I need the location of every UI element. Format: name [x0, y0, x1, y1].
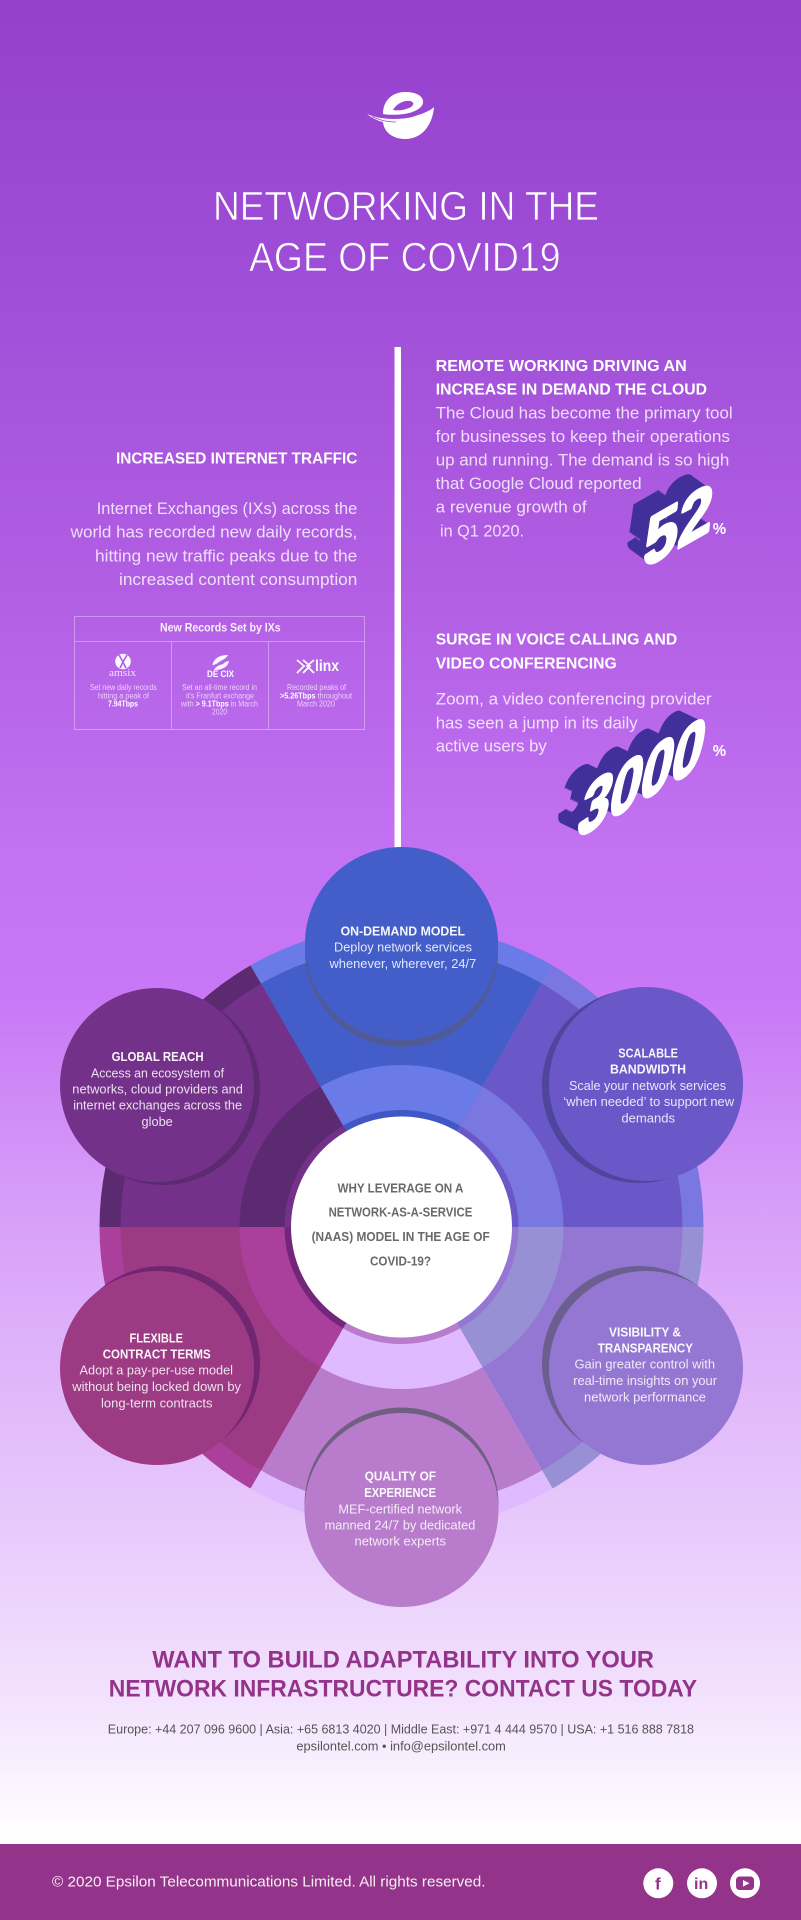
text block: zoom: [436, 690, 712, 756]
circle: flexible contract terms: long-term contracts: [101, 1395, 213, 1410]
circle: global reach: GLOBAL REACH: [112, 1049, 204, 1064]
center circle: why NaaS: [291, 1116, 512, 1338]
wheel sector: lower right: [457, 1227, 704, 1488]
text block: internet exchanges: increased content consumption: [119, 570, 357, 589]
wheel sector: bottom: [251, 1322, 552, 1513]
circle: on-demand model: ON-DEMAND MODEL: [341, 924, 465, 939]
heading: call to action: WANT TO BUILD ADAPTABILITY INTO YOUR: [152, 1646, 654, 1673]
circle: flexible contract terms: without being locked down by: [71, 1379, 241, 1394]
icon: de-cix: [212, 655, 229, 670]
table cell: amsix: 7.94Tbps: [108, 700, 138, 709]
title: NETWORKING IN THE: [213, 183, 599, 229]
text block: zoom: active users by: [436, 737, 547, 756]
table cell: amsix: amsix: [109, 667, 137, 679]
circle: visibility and transparency: network performance: [584, 1389, 706, 1404]
text block: cloud demand: The Cloud has become the primary tool: [436, 403, 733, 422]
circle: global reach: [60, 988, 260, 1185]
panel: voice and video: [436, 632, 726, 760]
percent sign: 3000: %: [713, 743, 726, 760]
circle: flexible contract terms: FLEXIBLE: [130, 1330, 183, 1345]
text block: cloud demand: [436, 403, 733, 540]
center circle: why NaaS: (NAAS) MODEL IN THE AGE OF: [312, 1229, 490, 1244]
table cell: de-cix: with > 9.1Tbps in March: [180, 700, 258, 709]
heading: increased internet traffic: INCREASED INTERNET TRAFFIC: [116, 450, 358, 467]
circle: global reach: networks, cloud providers and: [72, 1081, 243, 1096]
heading: call to action: NETWORK INFRASTRUCTURE? CONTACT US TODAY: [109, 1676, 697, 1703]
wheel sector: upper right: [456, 966, 704, 1227]
text block: zoom: Zoom, a video conferencing provider: [436, 690, 712, 709]
circle: global reach: globe: [142, 1114, 173, 1129]
circle: scalable bandwidth: SCALABLE: [618, 1045, 678, 1060]
heading: voice and video: [436, 632, 677, 672]
table cell: linx: March 2020: [297, 700, 335, 709]
circle: visibility and transparency: VISIBILITY &: [609, 1324, 681, 1339]
title: AGE OF COVID19: [249, 234, 560, 280]
table cell: de-cix: DE CIX: [207, 669, 235, 680]
heading: remote working: [436, 358, 707, 398]
circle: flexible contract terms: CONTRACT TERMS: [103, 1346, 211, 1361]
icon: linkedin: [687, 1868, 717, 1898]
wheel sector: lower left: [100, 1227, 346, 1488]
icon: linx: [297, 660, 314, 673]
stat: 3000 isometric number: 3000: [572, 698, 714, 857]
circle: scalable bandwidth: Scale your network services: [569, 1078, 726, 1093]
heading: remote working: INCREASE IN DEMAND THE CLOUD: [436, 381, 707, 398]
table cell: de-cix: [180, 655, 258, 717]
circle: global reach: Access an ecosystem of: [91, 1065, 224, 1080]
circle: quality of experience: manned 24/7 by dedicated: [325, 1518, 475, 1533]
text block: internet exchanges: hitting new traffic peaks due to the: [95, 546, 357, 565]
circle: visibility and transparency: [542, 1266, 743, 1465]
heading: voice and video: VIDEO CONFERENCING: [436, 655, 617, 672]
icon: facebook: [643, 1868, 673, 1898]
table cell: linx: [280, 658, 353, 709]
center circle: why NaaS: NETWORK-AS-A-SERVICE: [329, 1205, 473, 1220]
text block: cloud demand: for businesses to keep their operations: [436, 427, 730, 446]
table cell: linx: >5.26Tbps throughout: [280, 691, 353, 700]
icon: facebook: f: [655, 1874, 661, 1894]
circle: quality of experience: EXPERIENCE: [364, 1485, 436, 1500]
text block: contact details: Europe: +44 207 096 9600 | Asia: +65 6813 4020 | Middle East: +971 4 444 9570 | USA: +1 516 888 7818: [108, 1721, 694, 1736]
circle: on-demand model: whenever, wherever, 24/7: [329, 956, 476, 971]
circle: flexible contract terms: [60, 1266, 260, 1465]
text block: internet exchanges: Internet Exchanges (IXs) across the: [97, 499, 357, 518]
text block: zoom: has seen a jump in its daily: [436, 713, 638, 732]
circle: scalable bandwidth: [542, 987, 743, 1183]
circle: on-demand model: Deploy network services: [334, 940, 472, 955]
circle: visibility and transparency: real-time insights on your: [573, 1373, 718, 1388]
table: new records set by IXs: [74, 616, 364, 730]
footer bar: [0, 1844, 801, 1920]
icon: youtube: [730, 1868, 760, 1898]
icon: amsix: [115, 654, 131, 669]
circle: quality of experience: QUALITY OF: [365, 1469, 436, 1484]
wheel sector: top: [250, 940, 552, 1132]
percent sign: 52: %: [713, 521, 726, 538]
table cell: linx: Recorded peaks of: [287, 683, 347, 692]
copyright text: © 2020 Epsilon Telecommunications Limited. All rights reserved.: [52, 1874, 486, 1891]
heading: call to action: [109, 1646, 697, 1703]
text block: cloud demand: in Q1 2020.: [440, 521, 524, 540]
text block: cloud demand: that Google Cloud reported: [436, 474, 642, 493]
circle: global reach: internet exchanges across the: [73, 1098, 242, 1113]
table cell: amsix: Set new daily records: [90, 683, 157, 692]
text block: internet exchanges: world has recorded new daily records,: [70, 522, 357, 541]
center circle: why NaaS: COVID-19?: [370, 1253, 431, 1268]
circle: visibility and transparency: Gain greater control with: [574, 1357, 715, 1372]
text block: internet exchanges: [70, 499, 357, 589]
heading: remote working: REMOTE WORKING DRIVING AN: [436, 358, 687, 375]
circle: on-demand model: [305, 847, 498, 1047]
table cell: amsix: [90, 654, 157, 709]
wheel sector: upper left: [100, 966, 346, 1227]
circle: quality of experience: [304, 1408, 498, 1607]
table cell: de-cix: 2020: [212, 708, 227, 717]
table cell: linx: linx: [315, 658, 339, 675]
circle: quality of experience: network experts: [354, 1534, 446, 1549]
icon: linkedin: in: [694, 1876, 708, 1893]
text block: cloud demand: a revenue growth of: [436, 498, 587, 517]
text block: cloud demand: up and running. The demand is so high: [436, 451, 729, 470]
text block: contact details: epsilontel.com • info@epsilontel.com: [296, 1739, 506, 1754]
circle: flexible contract terms: Adopt a pay-per-use model: [80, 1363, 233, 1378]
text block: contact details: [108, 1721, 694, 1754]
circle: scalable bandwidth: ‘when needed’ to support new: [563, 1094, 735, 1109]
circle: visibility and transparency: TRANSPARENCY: [598, 1340, 693, 1355]
logo: Epsilon: [367, 92, 434, 139]
panel: remote working: [436, 358, 733, 540]
vertical divider bar: [394, 347, 401, 849]
panel: increased internet traffic: [70, 450, 358, 589]
circle: quality of experience: MEF-certified network: [338, 1501, 462, 1516]
stat: 52 isometric number: 52: [641, 466, 717, 585]
table cell: de-cix: Set an all-time record in: [182, 683, 257, 692]
table cell: de-cix: it's Franfurt exchange: [186, 691, 254, 700]
circle: scalable bandwidth: demands: [621, 1110, 675, 1125]
table cell: amsix: hitting a peak of: [98, 691, 150, 700]
title: [213, 183, 599, 280]
table: new records set by IXs: New Records Set by IXs: [160, 623, 281, 635]
center circle: why NaaS: WHY LEVERAGE ON A: [338, 1181, 464, 1196]
chart: radial NaaS wheel: [60, 847, 743, 1607]
circle: scalable bandwidth: BANDWIDTH: [610, 1061, 686, 1076]
heading: voice and video: SURGE IN VOICE CALLING AND: [436, 632, 677, 649]
